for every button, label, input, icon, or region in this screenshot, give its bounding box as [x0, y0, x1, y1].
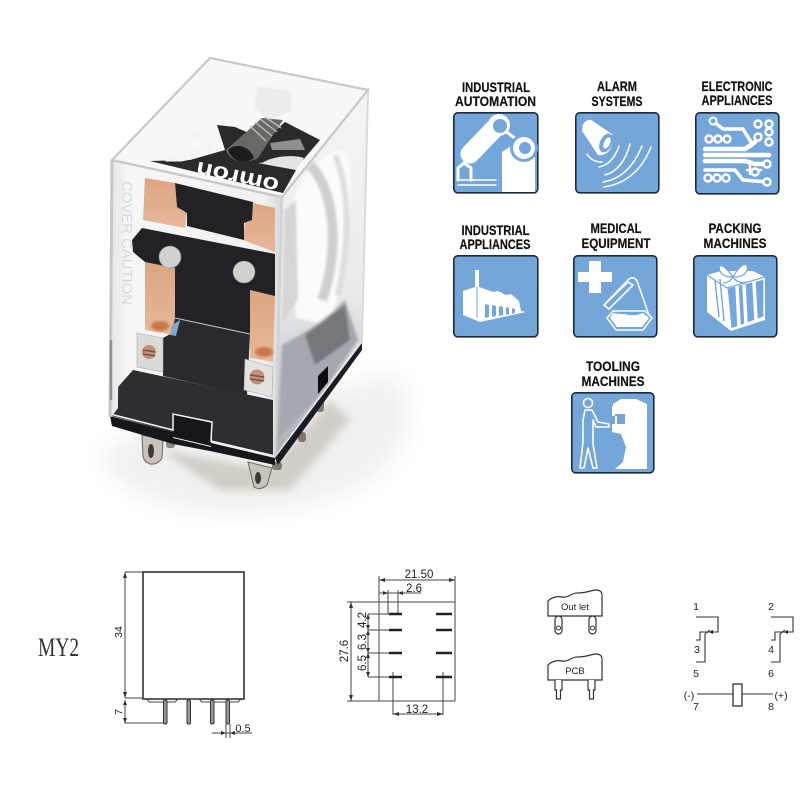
drawing: PCB terminal type: PCB — [565, 666, 585, 677]
terminal legs — [142, 400, 324, 489]
icon card: electronic appliances: ELECTRONIC — [702, 78, 772, 94]
drawing: pin layout with dimensions: 6.3 — [357, 634, 369, 650]
silver terminal tabs with screws — [137, 333, 273, 397]
icon card: packing machines — [694, 220, 777, 337]
coil — [226, 117, 283, 162]
ghost bracket under cover — [256, 88, 290, 118]
drawing: outlet terminal type — [548, 590, 602, 634]
icon card: industrial appliances: INDUSTRIAL — [462, 222, 530, 238]
drawing: circuit schematic: 8 — [768, 701, 774, 713]
icon card: alarm systems: SYSTEMS — [592, 93, 642, 109]
black armature and centre block — [132, 183, 275, 395]
icon card: industrial automation: INDUSTRIAL — [462, 79, 530, 95]
drawing: pin layout with dimensions: 2.6 — [406, 583, 422, 595]
drawing: pin layout with dimensions: 13.2 — [406, 704, 428, 716]
application icon grid — [454, 78, 779, 473]
drawing: pin layout with dimensions: 21.50 — [405, 569, 433, 581]
product photo: relay — [102, 58, 407, 512]
icon card: medical equipment: EQUIPMENT — [582, 235, 651, 251]
drawing: pin layout with dimensions — [339, 569, 455, 716]
coil former seen through side — [278, 150, 358, 440]
drawing: side view with dimensions: 0.5 — [235, 723, 251, 735]
icon card: medical equipment: MEDICAL — [590, 220, 642, 236]
internal dark module — [150, 122, 320, 193]
icon card: packing machines: PACKING — [708, 220, 762, 236]
drawing: side view with dimensions: 34 — [113, 626, 125, 638]
drawing: side view with dimensions — [113, 572, 252, 738]
drawing: circuit schematic: 1 — [693, 601, 699, 613]
drawing: circuit schematic: (-) — [684, 690, 694, 702]
drawing: circuit schematic: 2 — [768, 601, 774, 613]
drawing: outlet terminal type: Out let — [561, 602, 589, 613]
cover edges — [110, 90, 368, 457]
icon card: tooling machines: MACHINES — [582, 373, 644, 389]
copper contact blades — [143, 178, 275, 362]
glass cover: front and side faces — [110, 90, 368, 457]
top face of cover — [112, 58, 368, 199]
drawing: circuit schematic: (+) — [774, 690, 788, 702]
drawing: side view with dimensions: 7 — [113, 709, 125, 715]
floor shadow — [102, 375, 407, 512]
icon card: tooling machines: TOOLING — [586, 358, 640, 374]
drawing: circuit schematic: 7 — [693, 701, 699, 713]
icon card: industrial appliances: APPLIANCES — [460, 236, 530, 252]
black base — [110, 342, 362, 465]
embossed cover text: COVER CAUTION — [118, 181, 135, 305]
icon card: industrial automation — [454, 79, 538, 193]
drawing: circuit schematic — [684, 601, 793, 713]
drawing: circuit schematic: 3 — [694, 644, 700, 656]
white wires — [168, 131, 213, 160]
model label: MY2 — [38, 633, 79, 662]
drawing: circuit schematic: 6 — [768, 668, 774, 680]
icon card: packing machines: MACHINES — [704, 235, 766, 251]
icon card: tooling machines — [572, 358, 654, 473]
icon card: alarm systems: ALARM — [597, 78, 637, 94]
icon card: electronic appliances: APPLIANCES — [702, 92, 772, 108]
icon card: industrial automation: AUTOMATION — [455, 93, 536, 109]
brand name: omron — [194, 157, 281, 199]
icon card: alarm systems — [576, 78, 659, 193]
drawing: circuit schematic: 5 — [693, 668, 699, 680]
top edge highlight — [112, 58, 368, 197]
drawing: PCB terminal type — [548, 654, 602, 699]
drawing: pin layout with dimensions: 27.6 — [339, 640, 351, 662]
icon card: industrial appliances — [454, 222, 538, 337]
drawing: pin layout with dimensions: 6.5 — [357, 655, 369, 671]
drawing: circuit schematic: 4 — [768, 644, 774, 656]
drawing: pin layout with dimensions: 4.2 — [357, 612, 369, 628]
icon card: medical equipment — [574, 220, 657, 337]
rivets — [159, 246, 255, 283]
icon card: electronic appliances — [696, 78, 779, 194]
